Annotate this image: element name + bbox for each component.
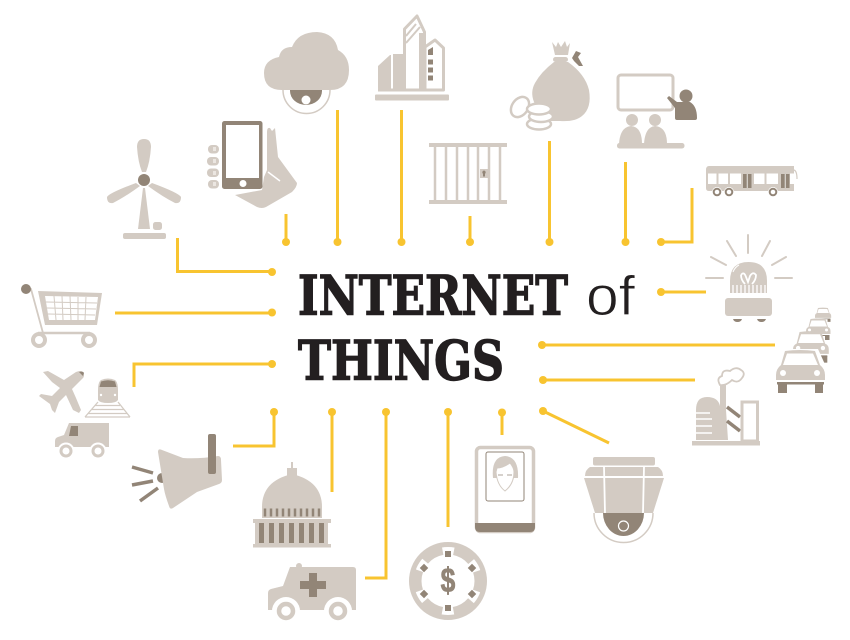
connector: ambulance xyxy=(365,408,390,578)
icon: ambulance xyxy=(268,563,356,625)
icon: cars in traffic xyxy=(774,308,831,393)
icon: jail bars xyxy=(429,143,507,204)
connector: transport xyxy=(134,360,276,387)
connector: megaphone xyxy=(233,408,278,446)
icon: factory xyxy=(692,368,760,446)
icon: train on tracks xyxy=(85,378,130,417)
connector: presentation xyxy=(622,162,630,246)
connector: money bag xyxy=(546,141,554,246)
icon: megaphone xyxy=(132,434,222,509)
icon: id badge xyxy=(475,448,535,532)
car: far back xyxy=(815,308,831,322)
icon: shopping cart xyxy=(21,284,102,346)
icon: smartphone in hand xyxy=(207,121,297,208)
connector: id badge xyxy=(498,408,506,435)
icon: bus xyxy=(706,166,797,197)
icon: buildings xyxy=(375,16,449,100)
title xyxy=(298,264,635,392)
icon: presentation xyxy=(617,75,697,148)
car: front xyxy=(774,349,828,393)
title word: of: of xyxy=(586,264,635,327)
connector: factory xyxy=(539,376,695,384)
connector: buildings xyxy=(398,110,406,246)
connector: smartphone xyxy=(282,214,290,246)
car: third xyxy=(806,318,830,340)
connector: wind turbine xyxy=(178,238,276,276)
connector: bus xyxy=(657,188,692,246)
icon: delivery van xyxy=(55,423,109,460)
icon: casino chip xyxy=(412,544,484,618)
title line: THINGS: THINGS xyxy=(298,328,504,392)
title line: INTERNET: INTERNET xyxy=(298,264,568,328)
connector: dome camera xyxy=(539,407,609,443)
connector: siren xyxy=(657,288,706,296)
connector: cloud camera xyxy=(334,110,342,246)
icon: cloud camera xyxy=(264,32,349,114)
dollar sign: $ xyxy=(441,562,455,600)
icon: airplane xyxy=(39,371,84,413)
icon: siren xyxy=(706,235,792,322)
icon: dome camera xyxy=(584,457,664,542)
connector: casino chip xyxy=(444,408,452,527)
icon: money bag with coins xyxy=(507,41,590,130)
connector: cars xyxy=(538,341,775,349)
icon: capitol building xyxy=(253,462,331,548)
car: second xyxy=(793,331,829,363)
connector: shopping cart xyxy=(115,308,276,316)
icon: wind turbine xyxy=(107,139,181,239)
connector: capitol xyxy=(328,408,336,492)
connector: jail xyxy=(466,216,474,246)
